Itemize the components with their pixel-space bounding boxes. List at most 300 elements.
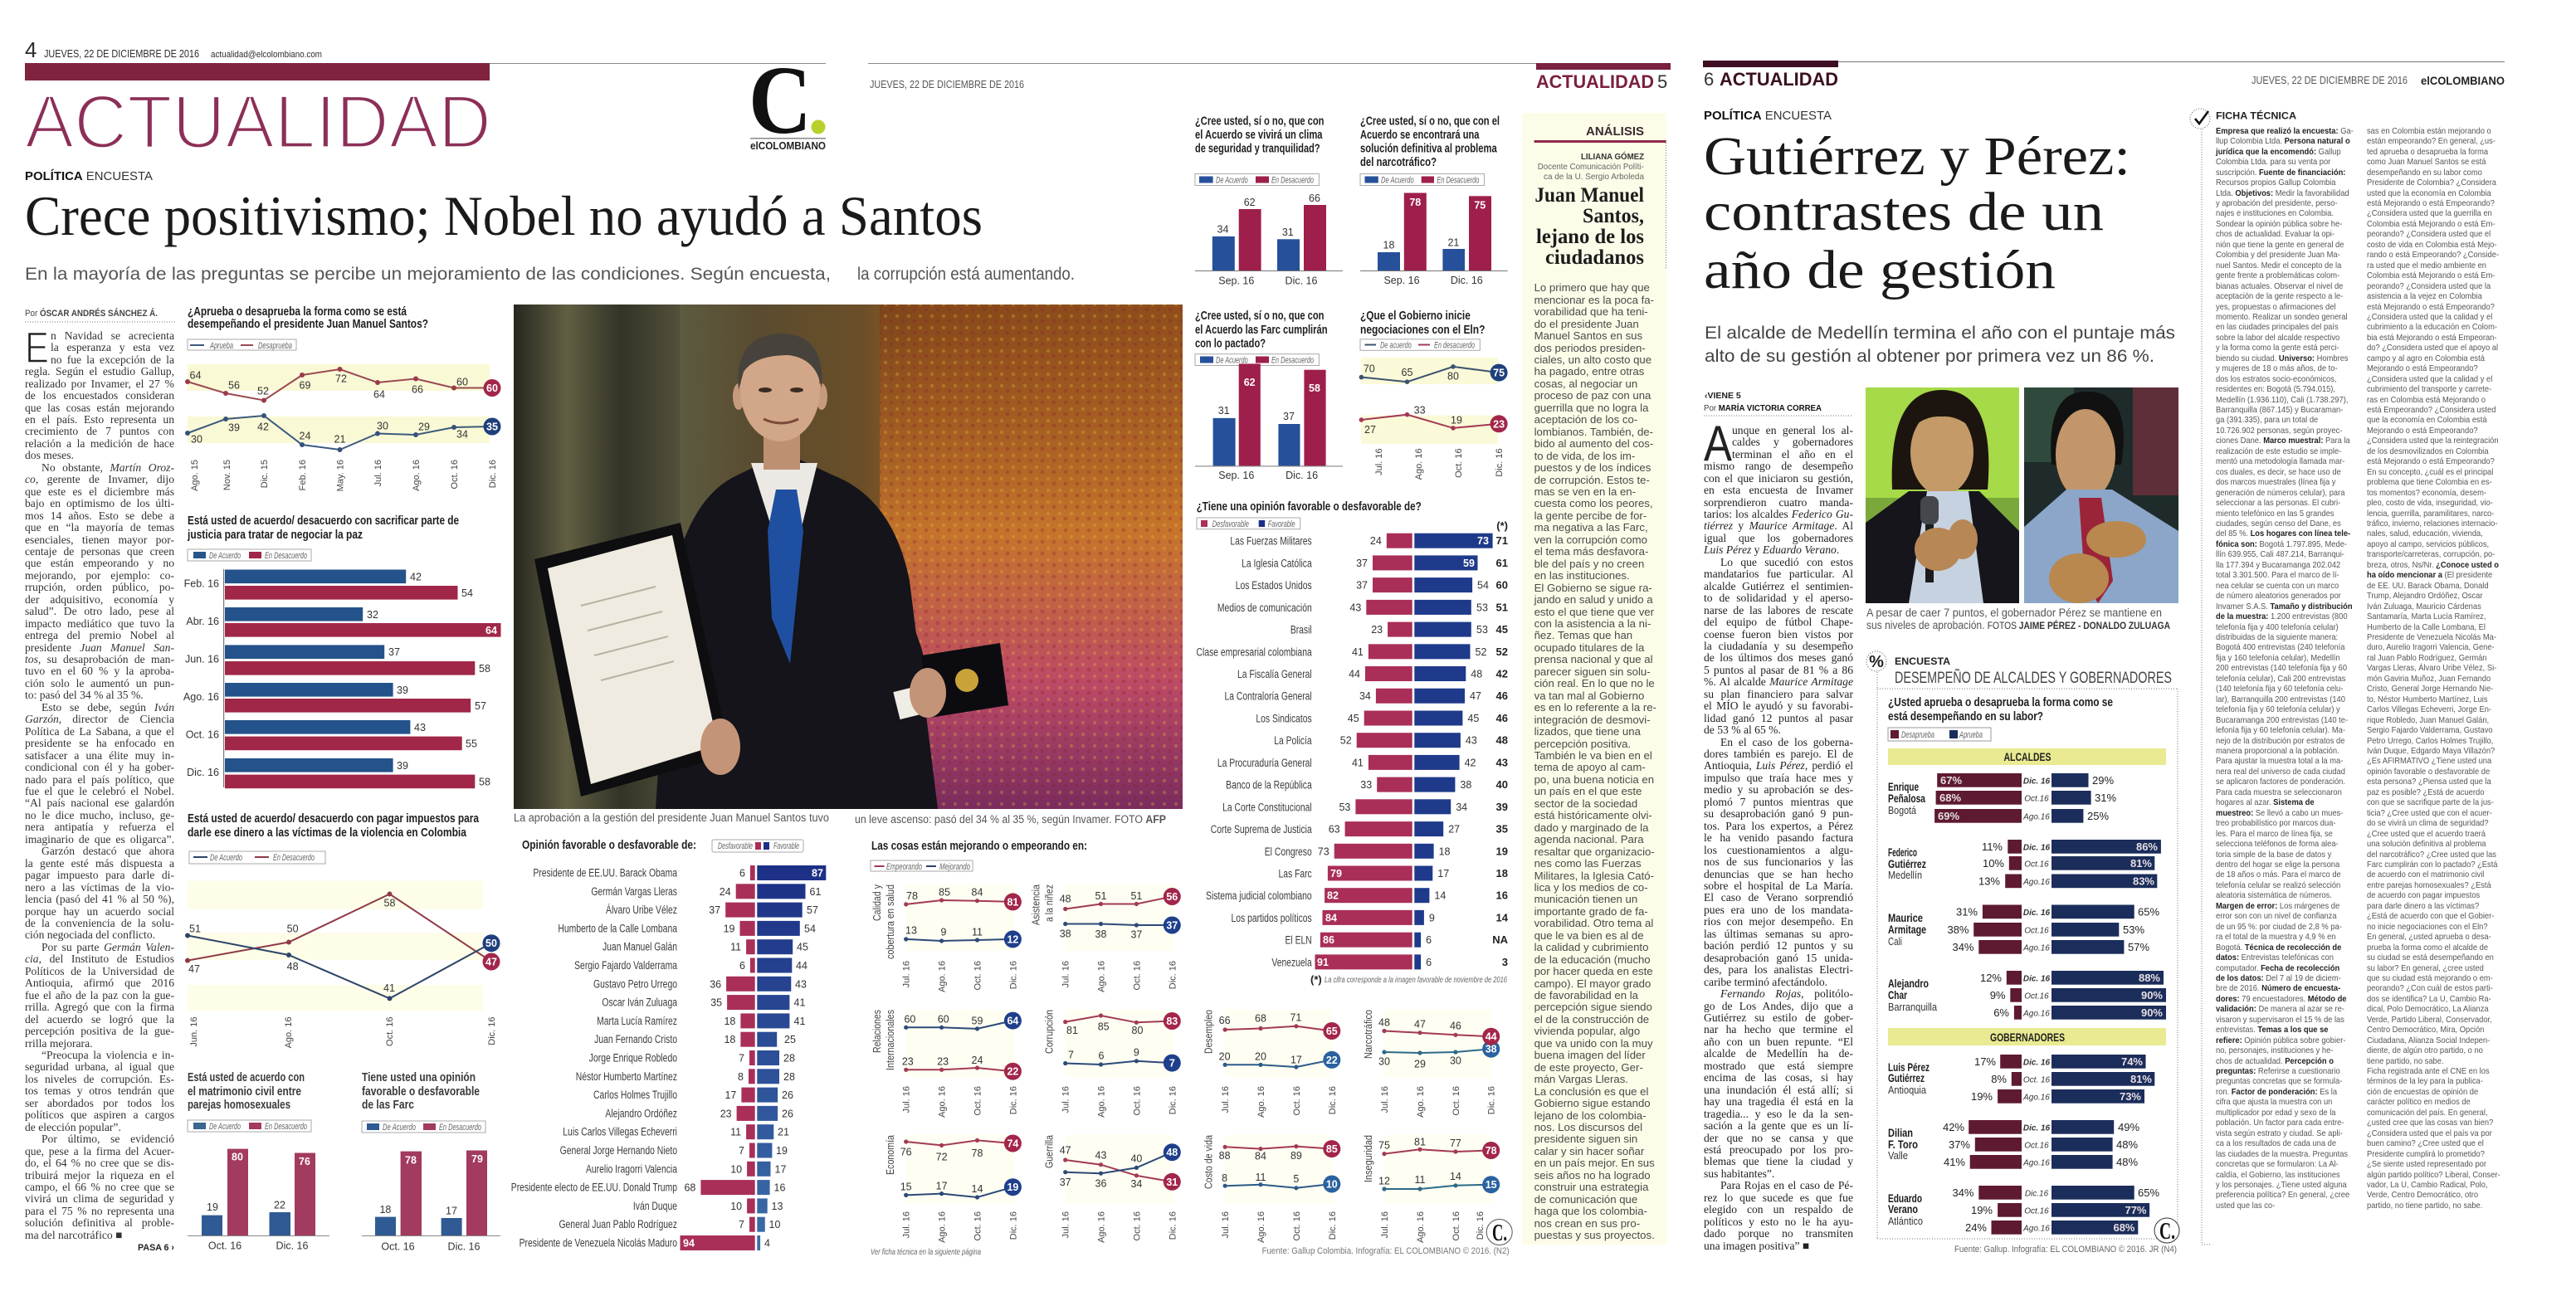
row group: Eduardo Verano bbox=[1888, 1186, 2159, 1235]
text block: analysis body: agenda nacional. Para bbox=[1534, 833, 1644, 845]
small chart: Asistencia a la niñez: Ago. 16 bbox=[1097, 961, 1107, 992]
small chart: Desempleo: 66 bbox=[1219, 1015, 1231, 1026]
row group: Dilian F. Toro: 42% bbox=[1943, 1121, 1964, 1133]
text block: technical sheet column 1: nión que tiene la gente en general de bbox=[2216, 241, 2344, 250]
x labels: Jul. 16 bbox=[1374, 448, 1384, 475]
text block: analysis body: esto el que tiene que ver bbox=[1534, 606, 1654, 618]
page number 5: 5 bbox=[1657, 71, 1667, 92]
text block: technical sheet column 1: aceptación de la gente respecto a le- bbox=[2216, 292, 2343, 301]
chart title: de seguridad y tranquilidad? bbox=[1195, 141, 1320, 156]
text block: analysis body: Manuel Santos en sus bbox=[1534, 329, 1642, 342]
footnote: (*) bbox=[1310, 973, 1322, 986]
row group: Maurice Armitage: 31% bbox=[1956, 906, 1978, 918]
text block: technical sheet column 1: bianas actuales. Observar el nivel de bbox=[2216, 282, 2343, 291]
chart: opinion of institutions bbox=[1197, 499, 1509, 986]
legend: En Desacuerdo bbox=[1271, 355, 1314, 365]
asterisk column values: 40 bbox=[1496, 778, 1508, 791]
text block: article column page 6: alcalde Gutiérrez el sentimien- bbox=[1704, 580, 1853, 592]
drop cap E: E bbox=[25, 324, 49, 373]
bars bbox=[1195, 363, 1343, 466]
favorable values bbox=[1426, 535, 1489, 968]
small chart: Costo de vida: Oct. 16 bbox=[1292, 1211, 1302, 1240]
text block: technical sheet column 2: cubrimiento del transporte y carrete- bbox=[2367, 385, 2491, 394]
photo: mayor Gutiérrez with microphone bbox=[1866, 387, 2019, 603]
name labels: Oscar Iván Zuluaga bbox=[602, 996, 677, 1009]
favorable values: 26 bbox=[782, 1108, 793, 1119]
text block: technical sheet column 1: preguntas concretas que se formula- bbox=[2216, 1077, 2342, 1086]
favorable values: 6 bbox=[1426, 934, 1432, 946]
unfavorable values: 10 bbox=[730, 1163, 742, 1175]
header rule bbox=[490, 63, 826, 64]
text block: analysis body: guerrilla que no logra la bbox=[1534, 402, 1648, 414]
small chart: Inseguridad: 75 bbox=[1378, 1140, 1390, 1152]
row labels: Ago. 16 bbox=[183, 691, 219, 703]
unfavorable values: 41 bbox=[1352, 646, 1364, 658]
text block: analysis body: un país en el que este bbox=[1534, 785, 1642, 797]
text block: technical sheet column 2: opinión favorable o desfavorable de bbox=[2367, 767, 2490, 777]
asterisk column values: 43 bbox=[1496, 756, 1508, 768]
text block: technical sheet column 2: prueba la forma como el alcalde de bbox=[2367, 943, 2488, 953]
text block: analysis body: de la educación (mucho bbox=[1534, 953, 1651, 966]
unfavorable values: 11 bbox=[730, 942, 741, 953]
chart title bbox=[1360, 309, 1485, 337]
text block: analysis body: lizados, que tiene una bbox=[1534, 725, 1641, 738]
small chart: Corrupción bbox=[1042, 1010, 1181, 1118]
legend: Desaprueba bbox=[1901, 730, 1934, 740]
text block: analysis body: proceso de paz con una bbox=[1534, 389, 1651, 402]
text block: technical sheet column 1: Bucaramanga 200 entrevistas (140 te- bbox=[2216, 716, 2348, 725]
text block: article column page 6: alcalde de Medellín ha de- bbox=[1704, 1047, 1853, 1060]
bar values: 42 bbox=[410, 571, 422, 582]
legend: De acuerdo bbox=[1380, 340, 1412, 350]
text block: article column page 6: mandatarios fue particular. Al bbox=[1704, 568, 1853, 580]
small chart: Guerrilla bbox=[1042, 1134, 1181, 1243]
small chart: Inseguridad: Dic. 16 bbox=[1476, 1211, 1486, 1240]
unfavorable values: 91 bbox=[1317, 957, 1329, 968]
bar values bbox=[207, 1152, 310, 1213]
unfavorable values: 7 bbox=[739, 1052, 744, 1064]
line: aprueba: 30 bbox=[377, 420, 388, 431]
text block: technical sheet column 2: peorando? ¿Con cuál de estos parti- bbox=[2367, 984, 2493, 993]
favorable values: 4 bbox=[764, 1238, 770, 1250]
small chart: Economía: Economía bbox=[884, 1134, 896, 1175]
subtitle: En la mayoría de las preguntas se percibe un mejoramiento de las condiciones. Según encuesta, bbox=[25, 265, 831, 284]
text block: analysis body: ciales, un alto costo que bbox=[1534, 353, 1651, 366]
small chart: Calidad y cobertura en salud: 13 bbox=[905, 924, 917, 936]
small chart: Corrupción: Jul. 16 bbox=[1061, 1086, 1071, 1113]
text block: technical sheet column 2 bbox=[2367, 127, 2500, 1211]
legend: De Acuerdo bbox=[383, 1123, 416, 1133]
name labels: Aurelio Iragorri Valencia bbox=[586, 1162, 677, 1176]
text block: article column page 6: 5 puntos al pasar de 81 % a 86 bbox=[1704, 664, 1853, 676]
text block: technical sheet column 1: validación: De manera al azar se re- bbox=[2216, 1005, 2344, 1014]
favorable values: 87 bbox=[812, 868, 823, 880]
small chart: Calidad y cobertura en salud: 11 bbox=[972, 926, 983, 938]
small chart: Guerrilla: 43 bbox=[1095, 1150, 1106, 1162]
text block: article column page 6: los cuestionamientos a algu- bbox=[1704, 844, 1853, 856]
text block: technical sheet column 2: ¿usted cree que las cosas van bien? bbox=[2367, 1118, 2493, 1128]
text block: technical sheet column 2: rique Robledo, Juan Manuel Galán, bbox=[2367, 716, 2489, 725]
text block: article column page 4: tos, su desaprobación de man- bbox=[25, 653, 174, 665]
text block: technical sheet column 2: comunicación del país. En general, bbox=[2367, 1109, 2488, 1118]
small chart: Costo de vida: 11 bbox=[1256, 1172, 1266, 1183]
values and labels: 37 bbox=[1283, 411, 1295, 422]
asterisk column values: 3 bbox=[1502, 956, 1508, 968]
row group: Luis Pérez: 19% bbox=[1971, 1090, 1993, 1103]
line: aprueba: 42 bbox=[257, 421, 269, 433]
asterisk column values: 46 bbox=[1496, 689, 1508, 702]
text block: technical sheet column 1: chos de actualidad. Percepción o bbox=[2216, 1057, 2334, 1066]
icon: check badge bbox=[2190, 109, 2210, 129]
x labels: Dic. 16 bbox=[448, 1241, 480, 1253]
sidebar headline bbox=[1534, 184, 1644, 269]
favorable values: 45 bbox=[797, 942, 808, 953]
asterisk column values: 35 bbox=[1496, 823, 1508, 836]
asterisk column values: 48 bbox=[1496, 734, 1508, 747]
name labels: Luis Carlos Villegas Echeverri bbox=[563, 1125, 677, 1138]
x axis labels: Dic. 16 bbox=[487, 1017, 497, 1045]
legend: En Desacuerdo bbox=[1437, 176, 1479, 186]
bar values: 39 bbox=[397, 760, 408, 772]
text block: technical sheet column 1: Colombia y del presidente Juan Ma- bbox=[2216, 251, 2340, 260]
text block: analysis body: construir una estrategia bbox=[1534, 1181, 1648, 1193]
legend bbox=[189, 851, 325, 864]
x labels: Dic. 16 bbox=[276, 1240, 308, 1251]
text block: article column page 4: presidente Juan Manuel San- bbox=[25, 641, 174, 654]
text block: analysis body: en un país mejor. En sus bbox=[1534, 1157, 1655, 1169]
text block: technical sheet column 1: de número aleatorios generados por bbox=[2216, 592, 2341, 601]
small chart: Calidad y cobertura en salud: Calidad y bbox=[871, 884, 883, 921]
institution labels: Los Sindicatos bbox=[1256, 712, 1312, 725]
small chart: Guerrilla: 31 bbox=[1166, 1177, 1178, 1188]
institution labels: La Procuraduría General bbox=[1217, 756, 1312, 769]
text block: analysis body: de este proyecto, Ger- bbox=[1534, 1061, 1643, 1074]
text block: technical sheet column 2: ¿Considera usted que la guerrilla en bbox=[2367, 209, 2492, 218]
unfavorable values: 18 bbox=[724, 1016, 735, 1027]
unfavorable values: 63 bbox=[1329, 824, 1340, 836]
small chart: Economía: Jul. 16 bbox=[902, 1211, 912, 1238]
maroon bar bbox=[1536, 63, 1671, 70]
text block: technical sheet column 2: ¿Es AFIRMATIVO ¿Tiene usted una bbox=[2367, 757, 2491, 766]
text block: article column page 6: caldes y gobernadores bbox=[1732, 436, 1853, 448]
text block: article column page 4: salud”. De otro lado, pese al bbox=[25, 605, 174, 617]
small chart: Asistencia a la niñez: Jul. 16 bbox=[1061, 961, 1071, 987]
text block: article column page 4: tribuirá mejor la riqueza en el bbox=[25, 1169, 174, 1182]
text block: technical sheet column 2: usted que la economía en Colombia bbox=[2367, 189, 2491, 198]
institution labels: Brasil bbox=[1290, 623, 1312, 636]
text block: technical sheet column 1: telefonía fija y 400 telefonía celular) bbox=[2216, 623, 2339, 632]
text block: analysis body: en las instituciones. bbox=[1534, 569, 1630, 582]
text block: technical sheet column 1: hogares al azar. Sistema de bbox=[2216, 798, 2315, 807]
text block: analysis body: mencionar es la poca fa- bbox=[1534, 294, 1654, 306]
small chart: Calidad y cobertura en salud: Oct. 16 bbox=[973, 961, 983, 990]
text block: technical sheet column 2: Santamaría, Marta Lucía Ramírez, bbox=[2367, 612, 2486, 621]
small chart: Narcotráfico: 44 bbox=[1486, 1031, 1497, 1043]
bar values: 19 bbox=[207, 1201, 218, 1213]
text block: article column page 4: no le dice mucho, incluso, ge- bbox=[25, 809, 174, 821]
text block: technical sheet column 2: ral Juan Pablo Rodríguez, Germán bbox=[2367, 654, 2487, 663]
text block: technical sheet column 1: población. Un factor para cada entre- bbox=[2216, 1118, 2344, 1128]
row group: Alejandro Char: Oct.16 bbox=[2024, 992, 2049, 1001]
text block: analysis body: ma negativa a las Farc, bbox=[1534, 521, 1648, 534]
row group: Luis Pérez: 17% bbox=[1974, 1055, 1996, 1068]
line: en desacuerdo bbox=[185, 891, 491, 963]
values and labels: 78 bbox=[1409, 197, 1421, 208]
row group: Alejandro Char: 12% bbox=[1980, 972, 2002, 984]
unfavorable values: 37 bbox=[1356, 558, 1368, 569]
small chart: Narcotráfico: Narcotráfico bbox=[1362, 1010, 1374, 1059]
favorable values: 14 bbox=[1434, 890, 1446, 902]
text block: article column page 4: no fue la excepción de la bbox=[51, 353, 174, 366]
favorable bars bbox=[1414, 534, 1493, 969]
text block: article column page 6: de 53 % al 65 %. bbox=[1704, 724, 1781, 736]
text block: technical sheet column 1: Empresa que realizó la encuesta: Ga- bbox=[2216, 127, 2354, 136]
small chart: Costo de vida: Costo de vida bbox=[1202, 1134, 1214, 1189]
small chart: Corrupción: Oct. 16 bbox=[1132, 1086, 1142, 1115]
unfavorable values: 36 bbox=[710, 978, 721, 990]
small chart: Relaciones internacionales: Dic. 16 bbox=[1008, 1086, 1018, 1114]
row group: Dilian F. Toro: 37% bbox=[1949, 1138, 1970, 1151]
row group: Enrique Peñalosa: 68% bbox=[1939, 792, 1961, 804]
text block: technical sheet column 2: apoyo al campo, servicios públicos, bbox=[2367, 540, 2489, 549]
text block: article column page 6: Gutiérrez su estilo de gober- bbox=[1704, 1011, 1853, 1024]
row group: Dilian F. Toro: Valle bbox=[1888, 1149, 1908, 1162]
small chart: Calidad y cobertura en salud: Ago. 16 bbox=[938, 961, 948, 992]
text block: analysis body: calar y sin hacer soñar bbox=[1534, 1145, 1644, 1157]
text block: technical sheet column 2: costo de vida en Colombia está Mejo- bbox=[2367, 241, 2496, 250]
text block: technical sheet column 2: problema que tiene Colombia en es- bbox=[2367, 478, 2492, 487]
text block: technical sheet column 2: Mejorando o está Empeorando? bbox=[2367, 364, 2478, 373]
legend: De Acuerdo bbox=[1216, 355, 1248, 365]
text block: analysis body: con la asistencia a la ni- bbox=[1534, 617, 1651, 630]
unfavorable values: 7 bbox=[739, 1219, 744, 1230]
text block: technical sheet column 1: de los datos: Del 7 al 19 de diciem- bbox=[2216, 974, 2341, 983]
text block: article column page 4: los niveles de corrupción. Es- bbox=[25, 1073, 174, 1085]
name labels: Néstor Humberto Martínez bbox=[576, 1070, 677, 1083]
small chart: Inseguridad: 12 bbox=[1378, 1176, 1390, 1187]
favorable values: 54 bbox=[1477, 580, 1489, 592]
text block: article column page 4: nado para el país político, que bbox=[25, 773, 174, 786]
row group: Federico Gutiérrez: 83% bbox=[2133, 875, 2154, 888]
text block: article column page 4: ma del narcotráfico ■ bbox=[25, 1229, 122, 1241]
date line: JUEVES, 22 DE DICIEMBRE DE 2016 bbox=[870, 78, 1024, 90]
text block: technical sheet column 1: no, personajes, instituciones y he- bbox=[2216, 1046, 2333, 1055]
survey heading: DESEMPEÑO DE ALCALDES Y GOBERNADORES bbox=[1895, 669, 2172, 687]
small chart: Relaciones internacionales bbox=[871, 1010, 1022, 1118]
text block: article column page 6: igual que los gobernadores bbox=[1704, 532, 1853, 544]
text block: article column page 4: lencia (pasó del 41 % al 50 %), bbox=[25, 893, 174, 905]
row group: Alejandro Char: Ago.16 bbox=[2022, 1009, 2050, 1019]
row group: Enrique Peñalosa: Peñalosa bbox=[1888, 792, 1925, 805]
text block: analysis body: cuesta como los peores, bbox=[1534, 497, 1653, 509]
drop cap A: A bbox=[1704, 416, 1732, 471]
line: desaprueba: 60 bbox=[456, 377, 468, 388]
small chart: Desempleo: 71 bbox=[1290, 1012, 1301, 1024]
text block: analysis body: de favorabilidad en la bbox=[1534, 989, 1638, 1001]
unfavorable values: 41 bbox=[1352, 757, 1364, 768]
text block: article column page 4: co, gerente de Invamer, dijo bbox=[25, 473, 174, 485]
legend: Desaprueba bbox=[258, 341, 292, 351]
sidebar headline: Juan Manuel bbox=[1534, 184, 1644, 207]
small chart: Corrupción: 9 bbox=[1134, 1047, 1139, 1059]
chart title: el Acuerdo se vivirá un clima bbox=[1195, 128, 1323, 142]
small chart: Relaciones internacionales: 24 bbox=[972, 1055, 983, 1066]
row group: Alejandro Char: Dic. 16 bbox=[2023, 974, 2051, 984]
small chart: Costo de vida: 85 bbox=[1326, 1143, 1338, 1155]
text block: technical sheet column 2: está Mejorando o está Empeorando? bbox=[2367, 199, 2495, 208]
small chart: Guerrilla: Oct. 16 bbox=[1132, 1211, 1142, 1240]
small chart: Narcotráfico: 47 bbox=[1414, 1019, 1426, 1031]
text block: technical sheet column 1: las ciudades de la muestra. Preguntas bbox=[2216, 1150, 2348, 1159]
text block: technical sheet column 1: se aplicaron factores de ponderación. bbox=[2216, 777, 2345, 787]
asterisk column values: 42 bbox=[1496, 667, 1508, 680]
row group: Enrique Peñalosa: Dic. 16 bbox=[2023, 777, 2051, 787]
text block: article column page 6: elegido con un respaldo de bbox=[1704, 1203, 1853, 1216]
small chart: Asistencia a la niñez: 51 bbox=[1130, 890, 1142, 902]
favorable values: 17 bbox=[1437, 868, 1449, 880]
small chart: Guerrilla: 40 bbox=[1130, 1153, 1142, 1165]
text block: technical sheet column 2: lencia, guerrilla, paramilitares, narco- bbox=[2367, 509, 2494, 519]
chart title: favorable o desfavorable bbox=[362, 1084, 480, 1099]
text block: article column page 6: dores también es parejo. El de bbox=[1704, 748, 1853, 760]
text block: article column page 4: Por último, se evidenció bbox=[41, 1133, 174, 1145]
favorable values: 18 bbox=[1439, 845, 1451, 857]
row group: Dilian F. Toro: 49% bbox=[2118, 1121, 2139, 1133]
row group: Enrique Peñalosa: Bogotá bbox=[1888, 804, 1917, 816]
main title page 6: Gutiérrez y Pérez: bbox=[1704, 126, 2130, 187]
small chart: Corrupción: 83 bbox=[1166, 1016, 1178, 1027]
text block: technical sheet column 1: Para ajustar la muestra total a la ma- bbox=[2216, 757, 2343, 766]
small chart: Calidad y cobertura en salud: Dic. 16 bbox=[1008, 961, 1018, 989]
text block: article column page 4: Política de La Sabana, a que el bbox=[25, 725, 174, 738]
text block: technical sheet column 1: (140 telefonía fija y 60 telefonía celu- bbox=[2216, 685, 2343, 694]
point values: 51 bbox=[189, 923, 201, 934]
text block: article column page 6: tiérrez y Maurice Armitage. Al bbox=[1704, 519, 1853, 532]
small chart: Desempleo: 65 bbox=[1326, 1026, 1338, 1037]
line: de acuerdo: 80 bbox=[1447, 371, 1459, 383]
small chart: Desempleo: 22 bbox=[1326, 1055, 1338, 1066]
text block: article column page 4: nero a las víctimas de la vio- bbox=[25, 881, 174, 894]
row group: Alejandro Char: Alejandro bbox=[1888, 977, 1929, 990]
bar values bbox=[379, 1153, 483, 1216]
asterisk column values: 18 bbox=[1496, 867, 1508, 880]
text block: technical sheet column 1: nuel Santos. Medir el concepto de la bbox=[2216, 261, 2341, 270]
row group: Luis Pérez: 73% bbox=[2120, 1090, 2141, 1103]
text block: technical sheet column 1: realización de este estudio se imple- bbox=[2216, 447, 2341, 456]
legend: Mejorando bbox=[939, 862, 970, 872]
small chart: Guerrilla: Ago. 16 bbox=[1097, 1211, 1107, 1243]
name labels: General Jorge Hernando Nieto bbox=[560, 1144, 677, 1157]
text block: technical sheet column 2: como Juan Manuel Santos se está bbox=[2367, 158, 2486, 167]
text block: analysis body: jando en salud y unido a bbox=[1534, 593, 1653, 606]
text block: article column page 6: año con un buen repunte. “El bbox=[1704, 1035, 1853, 1048]
text block: analysis body: lejano de los colombia- bbox=[1534, 1109, 1646, 1122]
row group: Alejandro Char: 90% bbox=[2141, 1006, 2163, 1019]
text block: technical sheet column 1: 10.726.902 personas, según proyec- bbox=[2216, 426, 2342, 436]
text block: technical sheet column 2: no inicie negociaciones con el Eln? bbox=[2367, 923, 2488, 932]
row group: Federico Gutiérrez: 11% bbox=[1982, 841, 2003, 853]
subtitle page 6 bbox=[1705, 324, 2175, 366]
text block: technical sheet column 1: llup Colombia Ltda. Persona natural o bbox=[2216, 137, 2350, 146]
text block: technical sheet column 1: ciones Dane. Marco muestral: Para la bbox=[2216, 436, 2350, 446]
favorable values: 27 bbox=[1448, 824, 1460, 836]
text block: article column page 6: Fernando Rojas, politólo- bbox=[1720, 987, 1853, 1000]
text block: technical sheet column 2: Presidente de Venezuela Nicolás Ma- bbox=[2367, 633, 2496, 642]
text block: technical sheet column 2: do se vivirá un clima de seguridad? bbox=[2367, 819, 2489, 828]
text block: analysis body: tema de apoyo al cam- bbox=[1534, 761, 1646, 773]
text block: technical sheet column 1: preferencia política? En general, ¿cree bbox=[2216, 1191, 2349, 1200]
text block: technical sheet column 1: Sondear la opinión pública sobre he- bbox=[2216, 220, 2342, 229]
row group: Eduardo Verano: 34% bbox=[1952, 1186, 1974, 1199]
row group: Federico Gutiérrez: Oct.16 bbox=[2024, 860, 2049, 870]
institution labels bbox=[1197, 534, 1312, 969]
asterisk column values: 71 bbox=[1496, 534, 1508, 547]
note: Ver ficha técnica en la siguiente página bbox=[871, 1247, 981, 1257]
unfavorable values: 33 bbox=[1360, 779, 1372, 791]
small chart: Guerrilla: 48 bbox=[1166, 1147, 1178, 1158]
text block: article column page 6: tos. Para los expertos, a Pérez bbox=[1704, 820, 1853, 832]
text block: technical sheet column 2: Petro Urrego, Carlos Holmes Trujillo, bbox=[2367, 737, 2493, 746]
small chart: Narcotráfico bbox=[1362, 1010, 1500, 1118]
asterisk column values: 60 bbox=[1496, 579, 1508, 592]
unfavorable values: 23 bbox=[1371, 624, 1383, 636]
small chart: Costo de vida: 10 bbox=[1326, 1178, 1338, 1190]
institution labels: La Iglesia Católica bbox=[1242, 557, 1312, 570]
text block: technical sheet column 2: ¿Considera usted que la reintegración bbox=[2367, 436, 2499, 446]
text block: article column page 6: encima de las cosas, si hay bbox=[1704, 1071, 1853, 1084]
favorable values: 19 bbox=[776, 1145, 788, 1157]
text block: technical sheet column 2: tos momentos? economía, desem- bbox=[2367, 489, 2486, 498]
row group: Alejandro Char: Barranquilla bbox=[1888, 1001, 1938, 1013]
chart title: Está usted de acuerdo/ desacuerdo con pagar impuestos para bbox=[188, 811, 480, 826]
text block: technical sheet column 2: de acuerdo con pagar impuestos bbox=[2367, 891, 2480, 900]
row group: Eduardo Verano: 77% bbox=[2125, 1204, 2147, 1216]
name labels: Carlos Holmes Trujillo bbox=[593, 1089, 677, 1101]
chart title: de las Farc bbox=[362, 1098, 414, 1112]
unfavorable values: 17 bbox=[724, 1089, 736, 1101]
text block: technical sheet column 1: vista según estrato y ciudad. Se apli- bbox=[2216, 1129, 2343, 1138]
panel frame: technical sheet bbox=[2190, 109, 2296, 1245]
text block: article column page 4: ción solo le aumentó un pun- bbox=[25, 677, 174, 689]
text block: technical sheet column 2: ras en Colombia está Mejorando o bbox=[2367, 396, 2486, 405]
text block: article column page 4: “Al país nacional ese galardón bbox=[25, 797, 174, 809]
text block: article column page 6: hay una tragedia él está en la bbox=[1704, 1095, 1853, 1108]
favorable values: 25 bbox=[784, 1034, 796, 1045]
unfavorable values: 19 bbox=[724, 923, 735, 934]
chart title: Está usted de acuerdo con bbox=[188, 1070, 305, 1084]
small chart: Calidad y cobertura en salud bbox=[871, 884, 1022, 992]
row group: Luis Pérez: 8% bbox=[1991, 1073, 2007, 1085]
bar values: 58 bbox=[479, 663, 490, 675]
text block: technical sheet column 2: Mejorando o está Empeorando? bbox=[2367, 426, 2478, 436]
author: LILIANA GÓMEZ bbox=[1581, 151, 1645, 162]
text block: technical sheet column 2: Cristo, General Jorge Hernando Nie- bbox=[2367, 685, 2493, 694]
text block: technical sheet column 1 bbox=[2216, 127, 2354, 1211]
text block: analysis body: puestos y de los índices bbox=[1534, 461, 1651, 474]
row group: Eduardo Verano: Atlántico bbox=[1888, 1215, 1923, 1227]
text block: article column page 6: Luis Pérez y Eduardo Verano. bbox=[1704, 543, 1839, 556]
text block: article column page 6: en esta encuesta de Invamer bbox=[1704, 484, 1853, 496]
unfavorable values: 18 bbox=[724, 1034, 735, 1045]
values and labels: Dic. 16 bbox=[1286, 470, 1318, 481]
row group: Federico Gutiérrez: 86% bbox=[2136, 841, 2158, 853]
photo caption bbox=[514, 811, 1166, 826]
text block: analysis body: la gente percibe de for- bbox=[1534, 509, 1647, 522]
row group: Eduardo Verano: 68% bbox=[2113, 1221, 2135, 1234]
text block: technical sheet column 2: rando o está Empeorando? ¿Conside- bbox=[2367, 251, 2499, 260]
asterisk column values: 14 bbox=[1496, 911, 1509, 923]
text block: technical sheet column 2: una solución definitiva al problema bbox=[2367, 840, 2486, 849]
